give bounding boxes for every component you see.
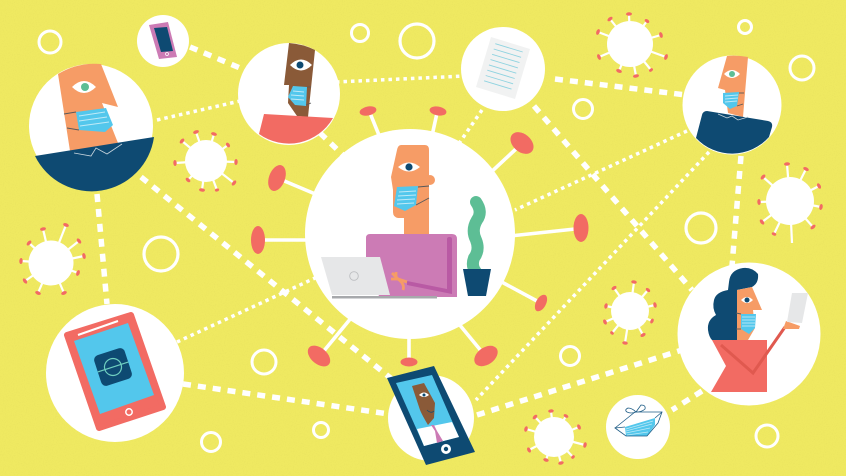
central virus hub with worker at laptop: [251, 105, 588, 370]
app icon: [93, 347, 133, 387]
tie: [431, 425, 443, 443]
virus spikes: [251, 105, 588, 370]
arm: [721, 327, 785, 373]
panel: document: [461, 27, 545, 111]
virus: right: [757, 162, 823, 243]
eye: [724, 70, 740, 78]
panel: person top left: [29, 64, 154, 191]
dress: [711, 340, 767, 392]
hand: [783, 321, 800, 329]
hub circle: [305, 129, 515, 339]
worker hand: [391, 272, 407, 290]
mask: [736, 313, 756, 334]
device: [787, 293, 808, 323]
panel: mask gift box: [606, 395, 670, 459]
virus: middle right: [602, 280, 657, 345]
panel: tablet: [46, 304, 184, 442]
shirt: [259, 114, 333, 144]
doctor face: [412, 383, 435, 425]
panel: phone with doctor: [387, 366, 475, 465]
doctor eye: [419, 392, 429, 397]
hair: [708, 268, 758, 340]
worker eye: [398, 162, 420, 172]
face: [718, 56, 748, 117]
panel: woman with device: [678, 262, 820, 406]
mask: [288, 86, 311, 106]
eye: [290, 60, 312, 70]
worker torso: [366, 234, 457, 297]
virus: top right: [595, 12, 669, 78]
mask: [723, 92, 744, 109]
shirt: [35, 137, 154, 191]
face: [58, 64, 118, 151]
eye: [741, 297, 753, 303]
panel: person top right: [682, 56, 782, 154]
panel: small phone: [137, 15, 189, 67]
virus: upper left: [173, 129, 238, 192]
laptop: [321, 257, 437, 298]
eye: [72, 81, 96, 93]
potted plant: [463, 202, 491, 296]
face: [284, 43, 315, 117]
virus: left: [19, 222, 86, 296]
virus: bottom: [524, 409, 587, 465]
worker mask: [394, 186, 429, 211]
panel: person brown top: [238, 43, 340, 145]
mask: [64, 108, 113, 132]
worker head and neck: [391, 145, 429, 234]
shirt: [696, 111, 772, 154]
home button: [441, 444, 451, 454]
network connection lines: [97, 47, 741, 420]
face: [737, 287, 762, 340]
